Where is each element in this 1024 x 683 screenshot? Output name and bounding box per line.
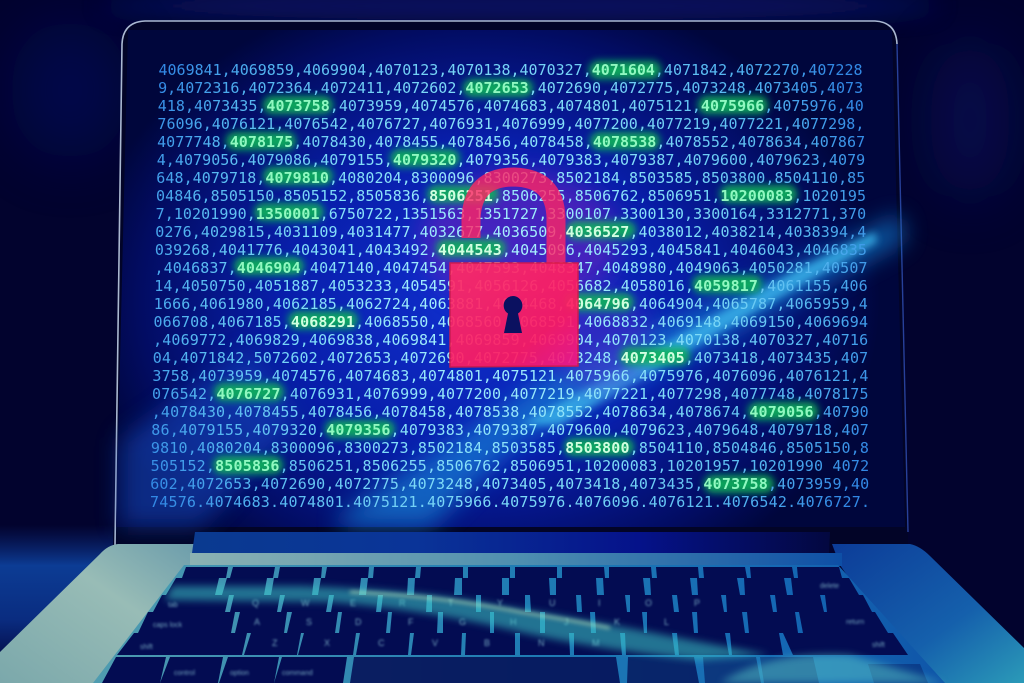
number listing: 076542,4076727,4076931,4076999,4077200,4077219,4077221,4077298,4077748,4078175 xyxy=(152,385,868,403)
number listing: 74576.4074683.4074801.4075121.4075966.4075976.4076096.4076121.4076542.4076727. xyxy=(150,493,870,511)
key labels: control xyxy=(174,670,195,677)
key labels: V xyxy=(432,638,438,648)
keyboard well xyxy=(93,565,945,683)
number listing: 9,4072316,4072364,4072411,4072602,4072653,4072690,4072775,4073248,4073405,4073 xyxy=(158,79,863,97)
key labels: delete xyxy=(820,583,839,590)
number listing: 648,4079718,4079810,4080204,8300096,8300273,8502184,8503585,8503800,8504110,85 xyxy=(156,169,865,187)
number listing: ,4046837,4046904,4047140,4047454,4047593,4048347,4048980,4049063,4050281,40507 xyxy=(154,259,868,277)
key labels: G xyxy=(459,617,466,627)
number listing: 418,4073435,4073758,4073959,4074576,4074683,4074801,4075121,4075966,4075976,40 xyxy=(158,97,864,115)
number listing: 7,10201990,1350001,6750722,1351563,1351727,3300107,3300130,3300164,3312771,370 xyxy=(156,205,866,223)
keyboard xyxy=(93,565,945,683)
key labels xyxy=(140,583,885,677)
keys xyxy=(102,567,928,683)
key labels: L xyxy=(664,617,669,627)
key labels: command xyxy=(282,670,313,677)
padlock keyhole xyxy=(504,296,522,333)
icon: open padlock xyxy=(450,177,578,367)
key labels: E xyxy=(350,598,356,608)
right palm rest xyxy=(832,544,1024,683)
key labels: option xyxy=(230,670,249,677)
number listing: 3758,4073959,4074576,4074683,4074801,4075121,4075966,4075976,4076096,4076121,4 xyxy=(152,367,868,385)
key labels: Z xyxy=(272,638,278,648)
number listing: 505152,8505836,8506251,8506255,8506762,8506951,10200083,10201957,10201990 4072 xyxy=(151,457,869,475)
key labels: C xyxy=(378,638,385,648)
number listing: 86,4079155,4079320,4079356,4079383,4079387,4079600,4079623,4079648,4079718,407 xyxy=(151,421,869,439)
key labels: I xyxy=(598,598,601,608)
key labels: D xyxy=(355,617,362,627)
screen xyxy=(116,30,905,527)
padlock shackle xyxy=(471,177,556,264)
number listing xyxy=(150,61,870,511)
number listing: 14,4050750,4051887,4053233,4054591,4056126,4056682,4058016,4059817,4061155,406 xyxy=(154,277,868,295)
number listing: 1666,4061980,4062185,4062724,4063881,4064468,4064796,4064904,4065787,4065959,4 xyxy=(154,295,868,313)
key labels: Y xyxy=(497,598,503,608)
key labels: O xyxy=(645,598,652,608)
number listing: 4,4079056,4079086,4079155,4079320,4079356,4079383,4079387,4079600,4079623,4079 xyxy=(157,151,865,169)
key labels: shift xyxy=(872,642,885,649)
key labels: S xyxy=(306,617,312,627)
number listing: 4069841,4069859,4069904,4070123,4070138,4070327,4071604,4071842,4072270,407228 xyxy=(158,61,862,79)
key labels: A xyxy=(254,617,260,627)
key labels: M xyxy=(592,638,600,648)
left palm rest xyxy=(0,544,200,683)
number listing: 4077748,4078175,4078430,4078455,4078456,4078458,4078538,4078552,4078634,407867 xyxy=(157,133,865,151)
number listing: ,4069772,4069829,4069838,4069841,4069859,4069904,4070123,4070138,4070327,40716 xyxy=(153,331,868,349)
number listing: 76096,4076121,4076542,4076727,4076931,4076999,4077200,4077219,4077221,4077298, xyxy=(157,115,864,133)
laptop base xyxy=(0,532,1024,683)
key labels: R xyxy=(399,598,406,608)
key labels: F xyxy=(408,617,414,627)
key labels: Q xyxy=(252,598,259,608)
key labels: X xyxy=(324,638,330,648)
key labels: K xyxy=(614,617,620,627)
key labels: return xyxy=(846,619,864,626)
laptop lid xyxy=(113,21,908,546)
number listing: 066708,4067185,4068291,4068550,4068560,4068591,4068832,4069148,4069150,4069694 xyxy=(154,313,868,331)
key labels: N xyxy=(538,638,544,648)
number listing: 0276,4029815,4031109,4031477,4032677,4036509,4036527,4038012,4038214,4038394,4 xyxy=(155,223,866,241)
number listing: 602,4072653,4072690,4072775,4073248,4073405,4073418,4073435,4073758,4073959,40 xyxy=(150,475,869,493)
green highlights xyxy=(213,61,818,493)
key labels: U xyxy=(549,598,556,608)
key labels: P xyxy=(694,598,700,608)
number listing: 039268,4041776,4043041,4043492,4044543,4045096,4045293,4045841,4046043,4046835 xyxy=(155,241,867,259)
key labels: W xyxy=(301,598,310,608)
front strip xyxy=(190,553,842,566)
number listing: 9810,4080204,8300096,8300273,8502184,8503585,8503800,8504110,8504846,8505150,8 xyxy=(151,439,869,457)
key labels: shift xyxy=(140,644,153,651)
hinge xyxy=(192,532,830,553)
padlock body xyxy=(450,263,578,367)
number listing: 04,4071842,5072602,4072653,4072690,4072775,4073248,4073405,4073418,4073435,407 xyxy=(153,349,868,367)
key labels: caps lock xyxy=(153,622,183,629)
key labels: T xyxy=(448,598,454,608)
number listing: 04846,8505150,8505152,8505836,8506251,8506255,8506762,8506951,10200083,1020195 xyxy=(156,187,866,205)
number listing: ,4078430,4078455,4078456,4078458,4078538,4078552,4078634,4078674,4079056,40790 xyxy=(152,403,869,421)
key labels: B xyxy=(484,638,490,648)
light streak across keyboard xyxy=(165,586,770,660)
key labels: tab xyxy=(168,602,178,609)
key labels: J xyxy=(564,617,568,627)
key labels: H xyxy=(510,617,516,627)
